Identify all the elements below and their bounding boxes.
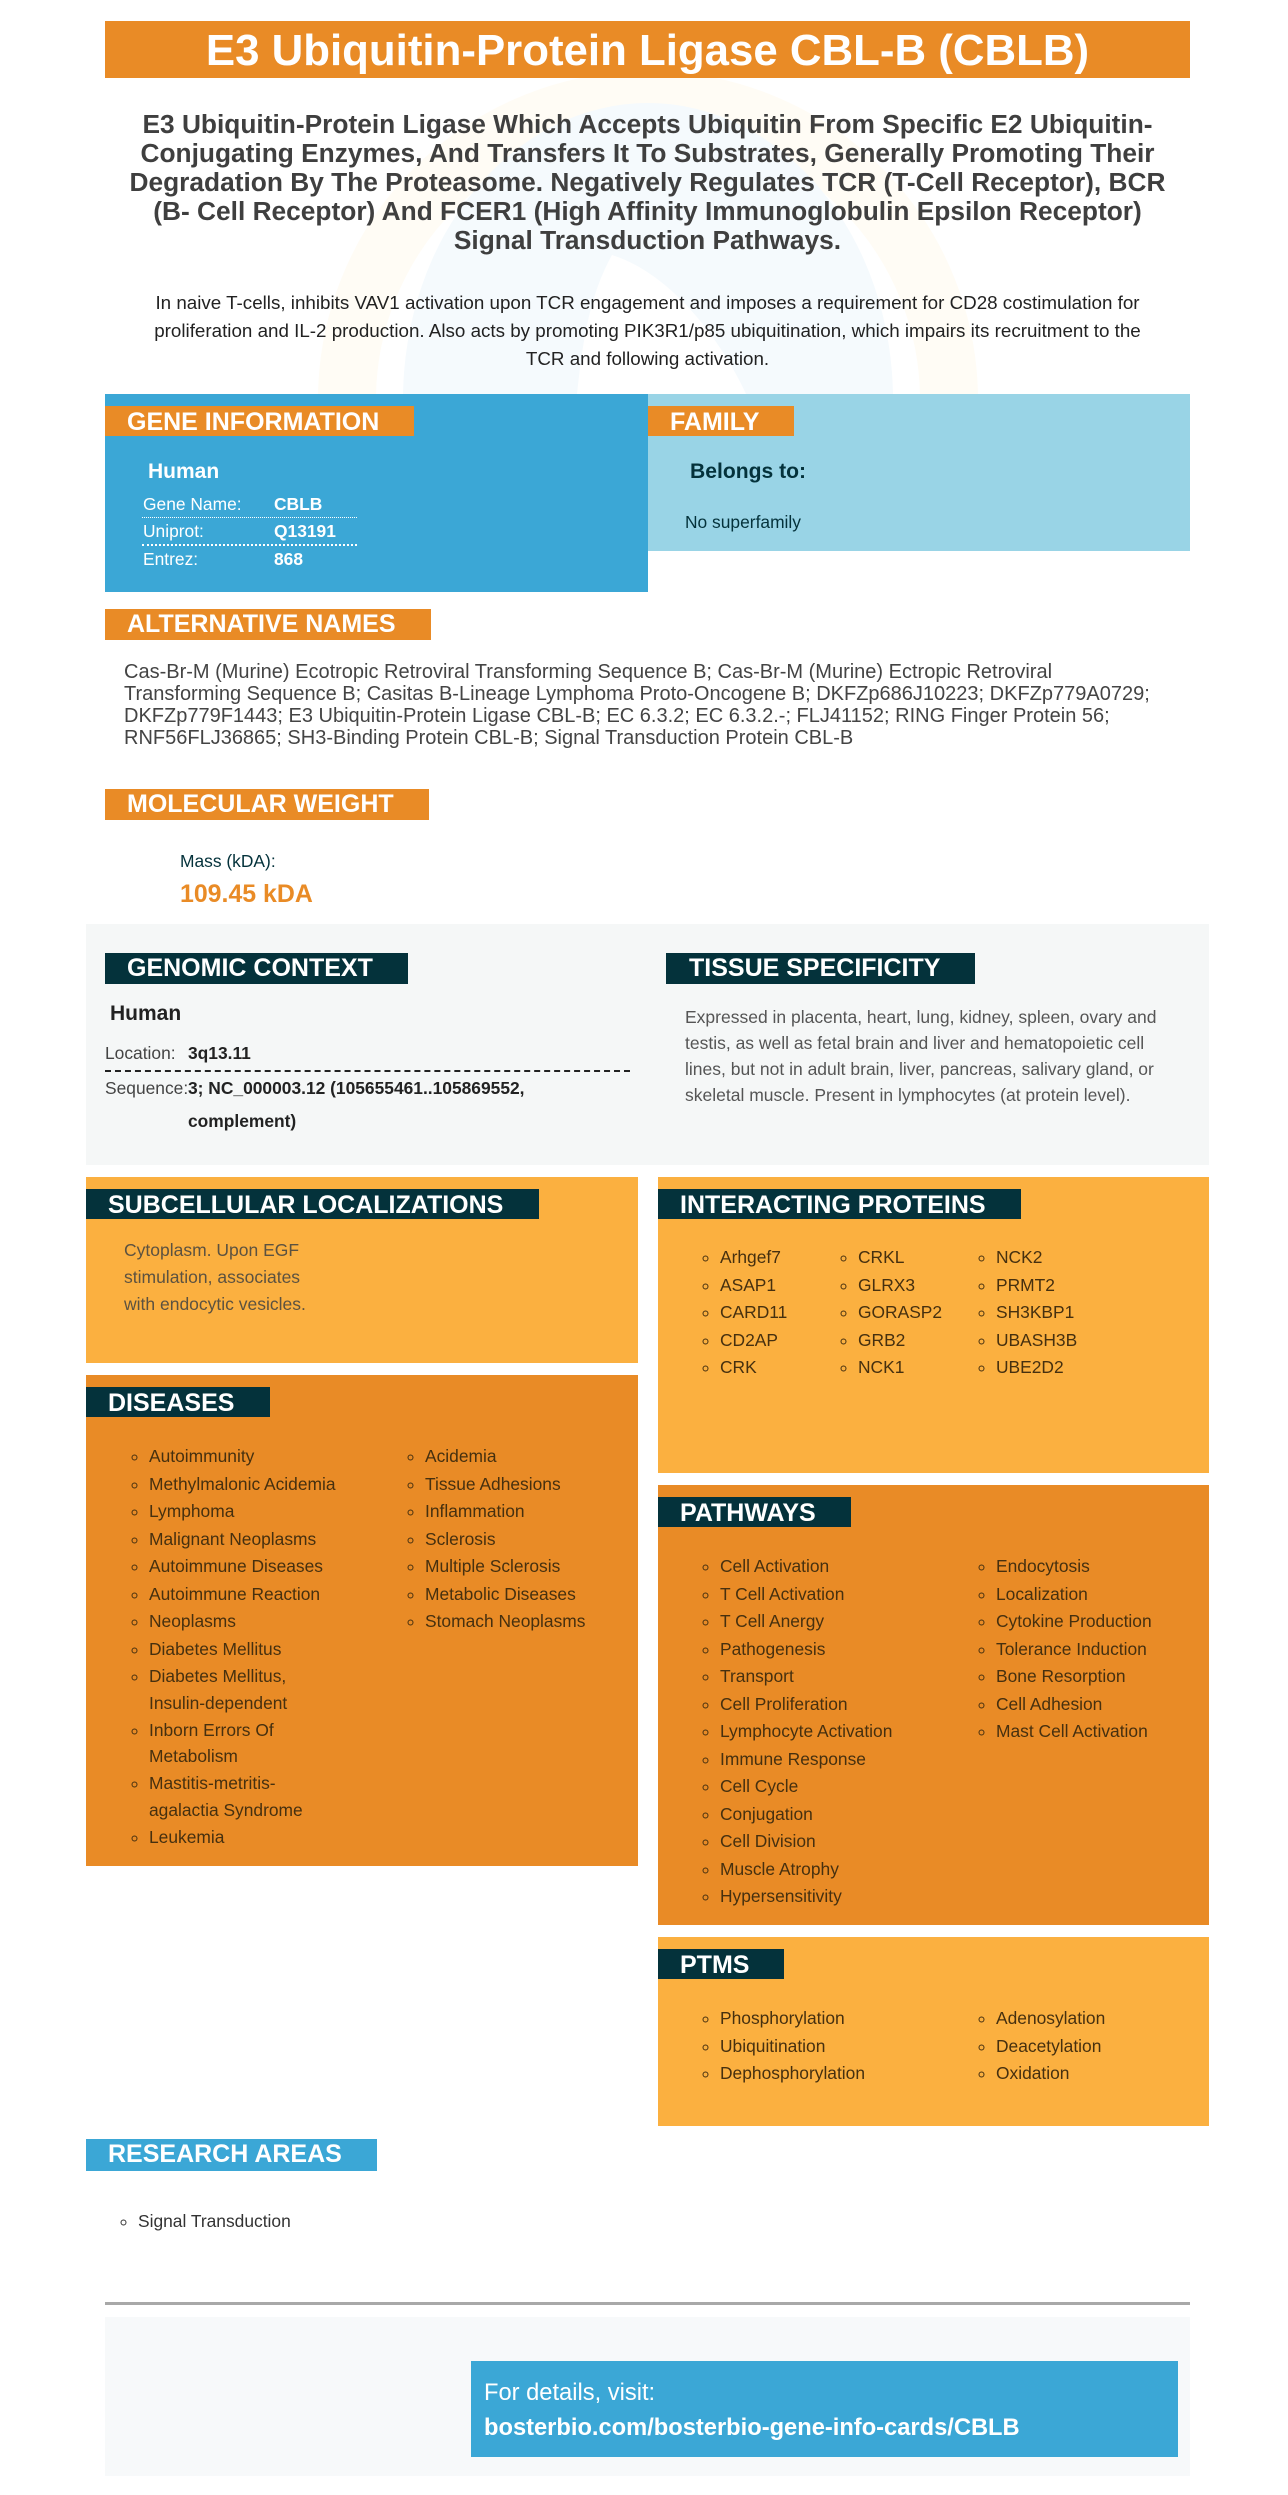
list: pathways column 2: Endocytosis	[996, 1556, 1090, 1576]
panel: family	[648, 394, 1190, 551]
list: diseases column 1: Methylmalonic Acidemia	[149, 1474, 336, 1494]
list: pathways column 1: Hypersensitivity	[720, 1886, 842, 1906]
heading: family: FAMILY	[670, 408, 759, 436]
alternative names text: Transforming Sequence B; Casitas B-Lineage Lymphoma Proto-Oncogene B; DKFZp686J10223; DKFZp779A0729;	[124, 683, 1150, 705]
list: PTMs column 2: Adenosylation	[996, 2008, 1105, 2028]
list: diseases column 2: Tissue Adhesions	[425, 1474, 561, 1494]
title banner: E3 Ubiquitin-Protein Ligase CBL-B (CBLB)	[206, 26, 1089, 75]
tissue specificity text: Expressed in placenta, heart, lung, kidney, spleen, ovary and	[685, 1007, 1156, 1027]
list: diseases column 2: Metabolic Diseases	[425, 1584, 576, 1604]
list: pathways column 2: Mast Cell Activation	[996, 1721, 1148, 1741]
list: diseases column 1: Diabetes Mellitus,	[149, 1666, 286, 1686]
list: diseases column 2	[408, 1446, 585, 1631]
localization text: stimulation, associates	[124, 1267, 300, 1287]
list: diseases column 1: Insulin-dependent	[149, 1693, 287, 1713]
list: diseases column 1: Metabolism	[149, 1746, 238, 1766]
location row: 3q13.11	[188, 1043, 251, 1063]
heading: PTMs: PTMS	[680, 1951, 749, 1979]
species label: Human	[148, 460, 219, 483]
list: proteins column 1	[702, 1247, 787, 1377]
list: diseases column 1: Leukemia	[149, 1827, 224, 1847]
subtitle: Conjugating Enzymes, And Transfers It To Substrates, Generally Promoting Their	[140, 138, 1155, 168]
list: PTMs column 2: Oxidation	[996, 2063, 1069, 2083]
list: pathways column 1: Pathogenesis	[720, 1638, 825, 1658]
list: pathways column 1: Cell Cycle	[720, 1776, 798, 1796]
list: diseases column 1: Inborn Errors Of	[149, 1720, 274, 1740]
list: pathways column 2: Localization	[996, 1584, 1088, 1604]
list: proteins column 3: NCK2	[996, 1247, 1042, 1267]
heading: PTMs	[658, 1949, 784, 1979]
gene info table: CBLB	[274, 494, 322, 514]
panel: PTMs	[658, 1937, 1209, 2126]
mass label: Mass (kDA):	[180, 851, 276, 871]
list: pathways column 1: T Cell Activation	[720, 1584, 844, 1604]
list: pathways column 1: Transport	[720, 1666, 794, 1686]
list: proteins column 2: GLRX3	[858, 1274, 915, 1294]
list: PTMs column 2: Deacetylation	[996, 2036, 1101, 2056]
sequence row: Sequence:	[105, 1078, 188, 1098]
list: proteins column 2: NCK1	[858, 1357, 904, 1377]
heading: diseases: DISEASES	[108, 1389, 234, 1417]
list: pathways column 1: Immune Response	[720, 1748, 866, 1768]
panel: genomic context and tissue specificity	[86, 924, 1209, 1165]
list: diseases column 2: Inflammation	[425, 1501, 525, 1521]
heading: alternative names: ALTERNATIVE NAMES	[127, 610, 396, 638]
list: diseases column 1	[132, 1446, 336, 1847]
list: proteins column 2: GRB2	[858, 1330, 905, 1350]
list: diseases column 1: Autoimmunity	[149, 1446, 254, 1466]
list: proteins column 1: CD2AP	[720, 1330, 778, 1350]
list: diseases column 1: Lymphoma	[149, 1501, 234, 1521]
list: diseases column 1: Diabetes Mellitus	[149, 1638, 281, 1658]
heading: genomic context: GENOMIC CONTEXT	[127, 954, 373, 982]
localization text: with endocytic vesicles.	[124, 1294, 306, 1314]
subtitle: Degradation By The Proteasome. Negatively Regulates TCR (T-Cell Receptor), BCR	[129, 167, 1166, 197]
heading: diseases	[86, 1387, 270, 1417]
belongs to label: Belongs to:	[690, 460, 806, 483]
list: proteins column 3: UBASH3B	[996, 1330, 1077, 1350]
panel: pathways	[658, 1485, 1209, 1925]
list: pathways column 2: Cell Adhesion	[996, 1694, 1102, 1714]
mass block	[180, 851, 313, 908]
alternative names text: DKFZp779F1443; E3 Ubiquitin-Protein Ligase CBL-B; EC 6.3.2; EC 6.3.2.-; FLJ41152; RING Finger Protein 56;	[124, 705, 1110, 727]
list: diseases column 2: Sclerosis	[425, 1528, 496, 1548]
list: pathways column 2	[978, 1556, 1152, 1741]
list: proteins column 2: GORASP2	[858, 1302, 942, 1322]
heading: tissue specificity: TISSUE SPECIFICITY	[689, 954, 940, 982]
list: proteins column 3	[978, 1247, 1077, 1377]
list: diseases column 1: agalactia Syndrome	[149, 1800, 303, 1820]
heading: family	[648, 406, 794, 436]
sequence row: complement)	[188, 1111, 296, 1131]
list: pathways column 2: Cytokine Production	[996, 1611, 1152, 1631]
background watermark logo	[318, 78, 978, 394]
list: proteins column 1: CARD11	[720, 1302, 787, 1322]
subtitle: (B- Cell Receptor) And FCER1 (High Affinity Immunoglobulin Epsilon Receptor)	[153, 196, 1142, 226]
callout label: For details, visit:	[484, 2380, 655, 2406]
list: pathways column 1: Lymphocyte Activation	[720, 1721, 892, 1741]
subtitle: Signal Transduction Pathways.	[454, 225, 841, 255]
localization text: Cytoplasm. Upon EGF	[124, 1240, 299, 1260]
list: PTMs column 1	[702, 2008, 865, 2083]
list: pathways column 1: Conjugation	[720, 1804, 813, 1824]
list: diseases column 2: Multiple Sclerosis	[425, 1556, 560, 1576]
list: diseases column 1: Autoimmune Diseases	[149, 1556, 323, 1576]
panel: footer	[105, 2317, 1190, 2476]
list: pathways column 1: Muscle Atrophy	[720, 1858, 839, 1878]
panel: subcellular localizations	[86, 1177, 638, 1363]
alternative names text	[124, 661, 1150, 749]
tissue specificity text: lines, but not in adult brain, liver, pancreas, salivary gland, or	[685, 1059, 1154, 1079]
subtitle: E3 Ubiquitin-Protein Ligase Which Accepts Ubiquitin From Specific E2 Ubiquitin-	[142, 109, 1153, 139]
tissue specificity text: testis, as well as fetal brain and liver and hematopoietic cell	[685, 1033, 1144, 1053]
alternative names text: Cas-Br-M (Murine) Ecotropic Retroviral Transforming Sequence B; Cas-Br-M (Murine) Ectropic Retroviral	[124, 661, 1052, 683]
description	[154, 292, 1141, 369]
list: pathways column 2: Bone Resorption	[996, 1666, 1126, 1686]
sequence row	[105, 1078, 525, 1131]
list: proteins column 3: PRMT2	[996, 1274, 1055, 1294]
heading: pathways	[658, 1497, 851, 1527]
panel: interacting proteins	[658, 1177, 1209, 1473]
panel: gene information	[105, 394, 648, 592]
heading: research areas: RESEARCH AREAS	[108, 2140, 342, 2168]
heading: interacting proteins: INTERACTING PROTEINS	[680, 1191, 986, 1219]
gene info table: Uniprot:	[143, 521, 204, 541]
list: pathways column 1: Cell Division	[720, 1831, 816, 1851]
description: In naive T-cells, inhibits VAV1 activation upon TCR engagement and imposes a requirement for CD28 costimulation for	[155, 292, 1140, 313]
species label: Human	[110, 1002, 181, 1025]
description: TCR and following activation.	[526, 348, 769, 369]
list: pathways column 1: Cell Proliferation	[720, 1694, 848, 1714]
heading: gene information: GENE INFORMATION	[127, 408, 379, 436]
list: PTMs column 1: Phosphorylation	[720, 2008, 845, 2028]
list: proteins column 1: Arhgef7	[720, 1247, 781, 1267]
subtitle	[129, 109, 1166, 255]
list: diseases column 1: Autoimmune Reaction	[149, 1584, 320, 1604]
panel: diseases	[86, 1375, 638, 1866]
location row: Location:	[105, 1043, 176, 1063]
description: proliferation and IL-2 production. Also acts by promoting PIK3R1/p85 ubiquitination, which impairs its recruitment to the	[154, 320, 1141, 341]
sequence row: 3; NC_000003.12 (105655461..105869552,	[188, 1078, 525, 1098]
callout: details link	[471, 2361, 1178, 2457]
list: proteins column 1: CRK	[720, 1357, 757, 1377]
alternative names text: RNF56FLJ36865; SH3-Binding Protein CBL-B; Signal Transduction Protein CBL-B	[124, 727, 853, 749]
title banner	[105, 21, 1190, 78]
list: pathways column 2: Tolerance Induction	[996, 1638, 1147, 1658]
list: pathways column 1: Cell Activation	[720, 1556, 829, 1576]
localization text	[124, 1240, 306, 1314]
mass value: 109.45 kDA	[180, 880, 313, 908]
gene info table: Gene Name:	[143, 494, 242, 514]
tissue specificity text	[685, 1007, 1156, 1105]
list: PTMs column 1: Dephosphorylation	[720, 2063, 865, 2083]
list: proteins column 1: ASAP1	[720, 1274, 776, 1294]
list: diseases column 2: Stomach Neoplasms	[425, 1611, 585, 1631]
gene info table: Entrez:	[143, 549, 198, 569]
gene info table: Q13191	[274, 521, 336, 541]
heading: pathways: PATHWAYS	[680, 1499, 816, 1527]
list: pathways column 1	[702, 1556, 892, 1906]
list: pathways column 1: T Cell Anergy	[720, 1611, 824, 1631]
list: diseases column 1: Neoplasms	[149, 1611, 236, 1631]
list: proteins column 3: UBE2D2	[996, 1357, 1064, 1377]
list: research areas: Signal Transduction	[138, 2211, 291, 2231]
family value: No superfamily	[685, 512, 801, 532]
list: proteins column 2: CRKL	[858, 1247, 904, 1267]
list: PTMs column 1: Ubiquitination	[720, 2036, 825, 2056]
list: proteins column 2	[840, 1247, 942, 1377]
list: diseases column 1: Mastitis-metritis-	[149, 1773, 276, 1793]
heading: molecular weight: MOLECULAR WEIGHT	[127, 790, 394, 818]
location row	[105, 1043, 251, 1063]
callout url: bosterbio.com/bosterbio-gene-info-cards/CBLB	[484, 2415, 1020, 2441]
list: diseases column 1: Malignant Neoplasms	[149, 1528, 316, 1548]
list: diseases column 2: Acidemia	[425, 1446, 497, 1466]
list: proteins column 3: SH3KBP1	[996, 1302, 1074, 1322]
list: PTMs column 2	[978, 2008, 1105, 2083]
gene info table: 868	[274, 549, 303, 569]
gene info table	[142, 494, 357, 569]
tissue specificity text: skeletal muscle. Present in lymphocytes (at protein level).	[685, 1085, 1130, 1105]
heading: subcellular localizations: SUBCELLULAR LOCALIZATIONS	[108, 1191, 503, 1219]
